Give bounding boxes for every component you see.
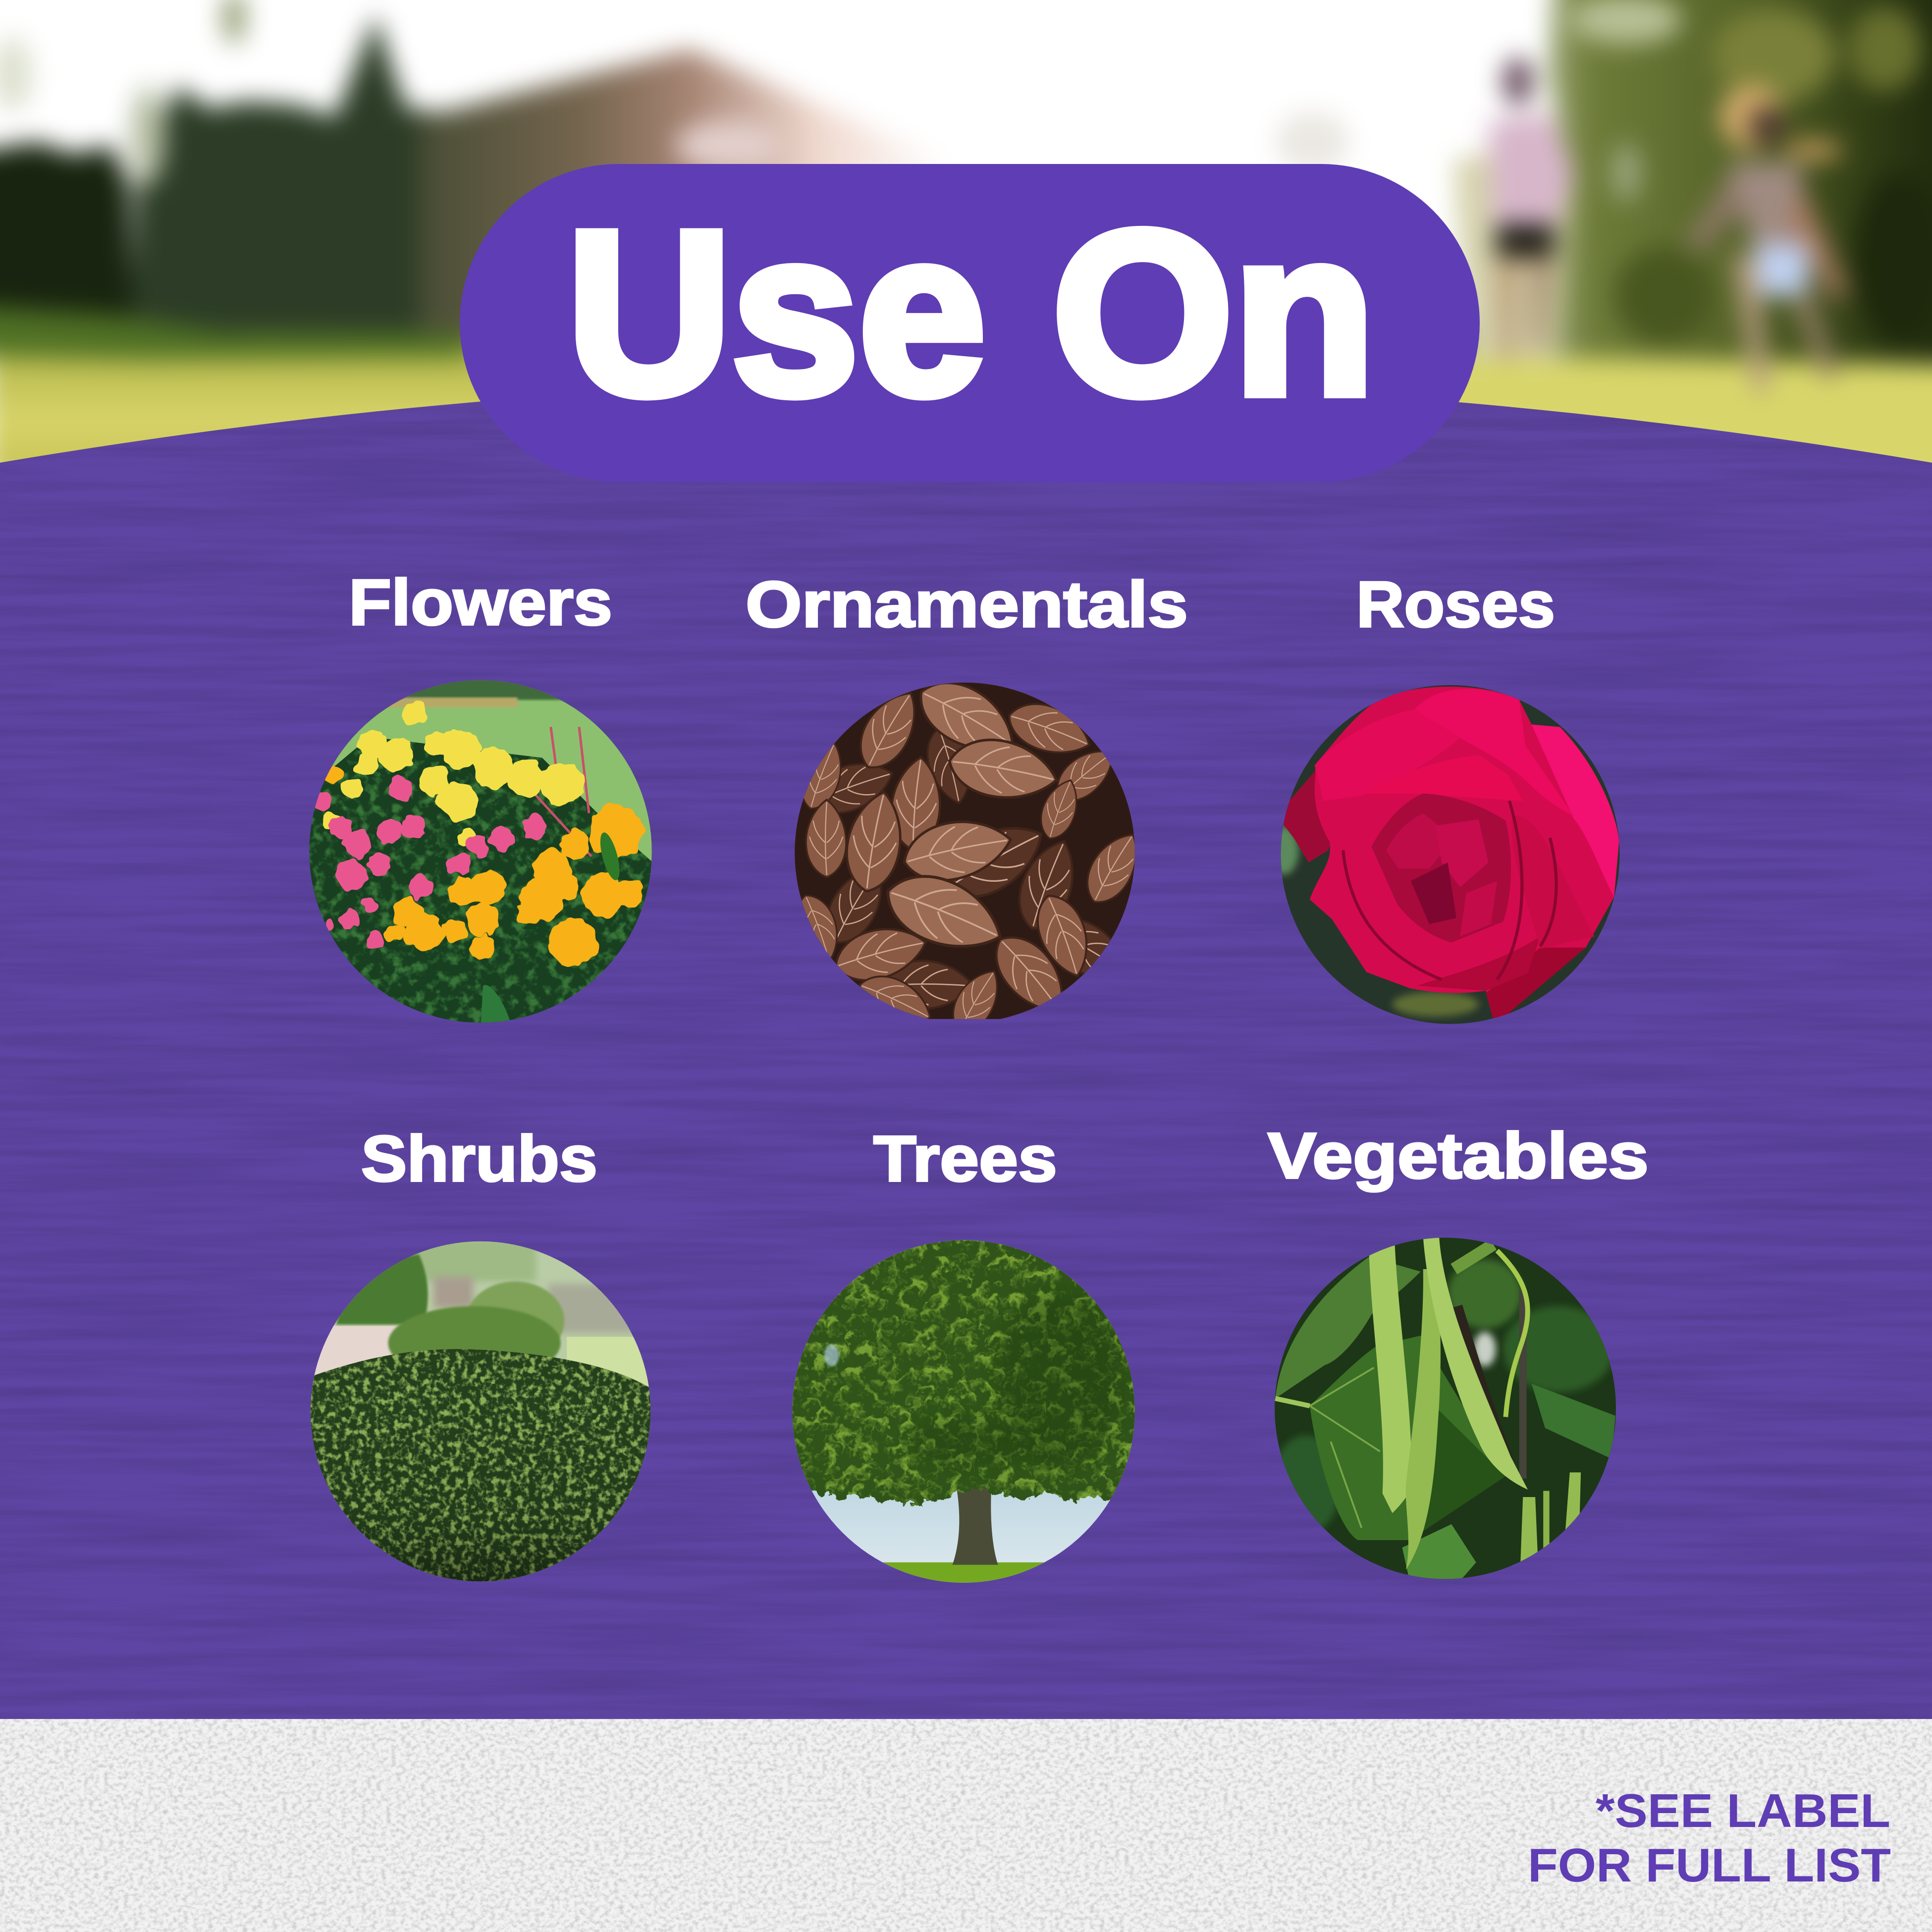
photo: ornamental bronze leaves (795, 683, 1135, 1019)
photo: red rose (1269, 678, 1626, 1029)
title pill (460, 164, 1480, 482)
photo: shrubs (308, 1238, 653, 1590)
heading: Flowers: Flowers (349, 566, 612, 639)
older child (1502, 56, 1534, 106)
heading: Vegetables: Vegetables (1268, 1119, 1649, 1192)
white plaster footer band (0, 1719, 1932, 1932)
younger child (1720, 85, 1784, 149)
footnote: see label for full list: *SEE LABEL (1596, 1784, 1890, 1837)
title: Use On: Use (567, 183, 986, 443)
photo: oak tree (776, 1220, 1152, 1599)
heading: Ornamentals: Ornamentals (746, 568, 1188, 641)
heading: Trees: Trees (873, 1122, 1057, 1195)
photo: green beans (1269, 1232, 1626, 1590)
footnote: see label for full list: FOR FULL LIST (1528, 1839, 1891, 1892)
photo: flowers (308, 678, 653, 1029)
purple wood-textured panel with arched top (0, 381, 1932, 1719)
background photo: children running on a lawn (0, 0, 1932, 493)
title: Use On: On (1052, 183, 1375, 443)
title: Use On (567, 183, 1375, 443)
heading: Shrubs: Shrubs (361, 1122, 597, 1195)
footnote: see label for full list (1528, 1784, 1891, 1892)
heading: Roses: Roses (1356, 568, 1555, 641)
